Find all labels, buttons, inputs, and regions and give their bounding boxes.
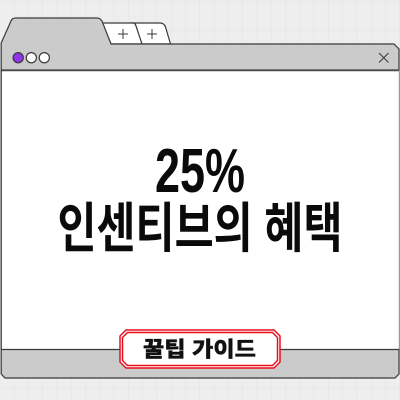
badge: tips guide: 꿀팁 가이드: [143, 338, 256, 362]
tab: plus tab one: [102, 23, 142, 44]
title: [58, 137, 342, 259]
icon: close: [379, 53, 388, 62]
window: top bar: [1, 18, 399, 70]
window: white body: [1, 70, 399, 349]
window: bottom bar: [1, 350, 399, 378]
icon: white dot: [39, 53, 49, 63]
tab: plus tab two: [131, 23, 170, 44]
icon: purple dot: [13, 53, 23, 63]
icon: white dot: [26, 53, 36, 63]
divider under top bar: [1, 70, 399, 72]
window: left and right edges: [0, 70, 2, 349]
badge: tips guide: [120, 330, 280, 368]
title: 25%: [155, 137, 245, 206]
